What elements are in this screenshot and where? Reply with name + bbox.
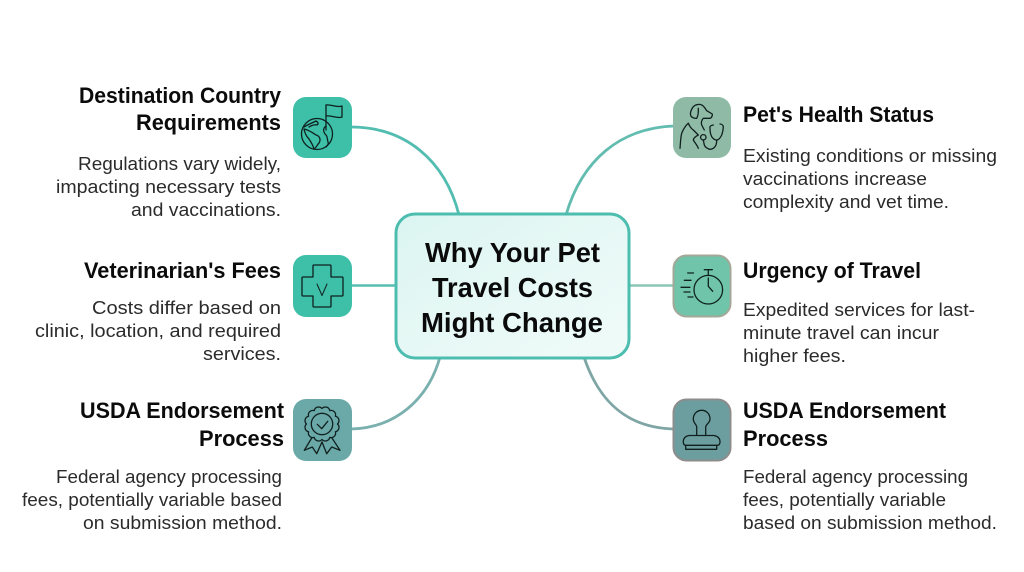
description: clinic, location, and required bbox=[35, 321, 281, 341]
block: USDA endorsement right bbox=[743, 398, 997, 533]
heading: Pet's Health Status bbox=[743, 102, 934, 127]
title bbox=[421, 237, 603, 338]
description: and vaccinations. bbox=[131, 200, 281, 220]
block: veterinarian's fees bbox=[35, 258, 281, 364]
block: urgency of travel bbox=[743, 258, 975, 366]
connector: veterinarian's fees bbox=[351, 284, 397, 287]
description bbox=[743, 467, 997, 533]
description: Federal agency processing bbox=[56, 467, 282, 487]
heading: Urgency of Travel bbox=[743, 258, 921, 283]
title: Travel Costs bbox=[432, 272, 593, 303]
description: Costs differ based on bbox=[92, 298, 281, 318]
central panel bbox=[396, 214, 629, 358]
heading: Destination Country bbox=[79, 83, 282, 108]
description: on submission method. bbox=[83, 513, 282, 533]
icon: medical cross with V bbox=[293, 255, 352, 317]
title: Why Your Pet bbox=[425, 237, 600, 268]
description bbox=[35, 298, 281, 364]
icon: award rosette bbox=[293, 399, 352, 461]
heading: Process bbox=[199, 426, 284, 451]
description bbox=[743, 146, 997, 212]
heading bbox=[80, 398, 285, 451]
description: services. bbox=[203, 344, 281, 364]
icon: stopwatch bbox=[674, 256, 730, 316]
description: minute travel can incur bbox=[743, 323, 939, 343]
heading bbox=[743, 398, 947, 451]
heading: Process bbox=[743, 426, 828, 451]
description: Regulations vary widely, bbox=[78, 154, 281, 174]
description: Federal agency processing bbox=[743, 467, 968, 487]
connector: pet's health status bbox=[566, 126, 674, 215]
description: fees, potentially variable based bbox=[22, 490, 282, 510]
description bbox=[743, 300, 975, 366]
description: based on submission method. bbox=[743, 513, 997, 533]
heading: Requirements bbox=[136, 110, 281, 135]
icon: rubber stamp bbox=[674, 400, 730, 460]
icon: dog with stethoscope bbox=[673, 97, 731, 158]
connector: USDA endorsement left bbox=[351, 357, 440, 429]
description bbox=[22, 467, 282, 533]
description: higher fees. bbox=[743, 346, 846, 366]
description: impacting necessary tests bbox=[56, 177, 281, 197]
heading: USDA Endorsement bbox=[743, 398, 947, 423]
heading: Veterinarian's Fees bbox=[84, 258, 281, 283]
connector: USDA endorsement right bbox=[584, 357, 674, 429]
block: USDA endorsement left bbox=[22, 398, 285, 533]
description bbox=[56, 154, 281, 220]
block: destination country requirements bbox=[56, 83, 282, 220]
block: pet's health status bbox=[743, 102, 997, 212]
connector: urgency of travel bbox=[628, 284, 674, 287]
description: fees, potentially variable bbox=[743, 490, 946, 510]
connector: destination country bbox=[351, 127, 459, 215]
heading bbox=[79, 83, 282, 135]
icon: globe with flag bbox=[293, 97, 352, 158]
description: Existing conditions or missing bbox=[743, 146, 997, 166]
description: vaccinations increase bbox=[743, 169, 927, 189]
description: complexity and vet time. bbox=[743, 192, 949, 212]
heading: USDA Endorsement bbox=[80, 398, 285, 423]
title: Might Change bbox=[421, 307, 603, 338]
description: Expedited services for last- bbox=[743, 300, 975, 320]
